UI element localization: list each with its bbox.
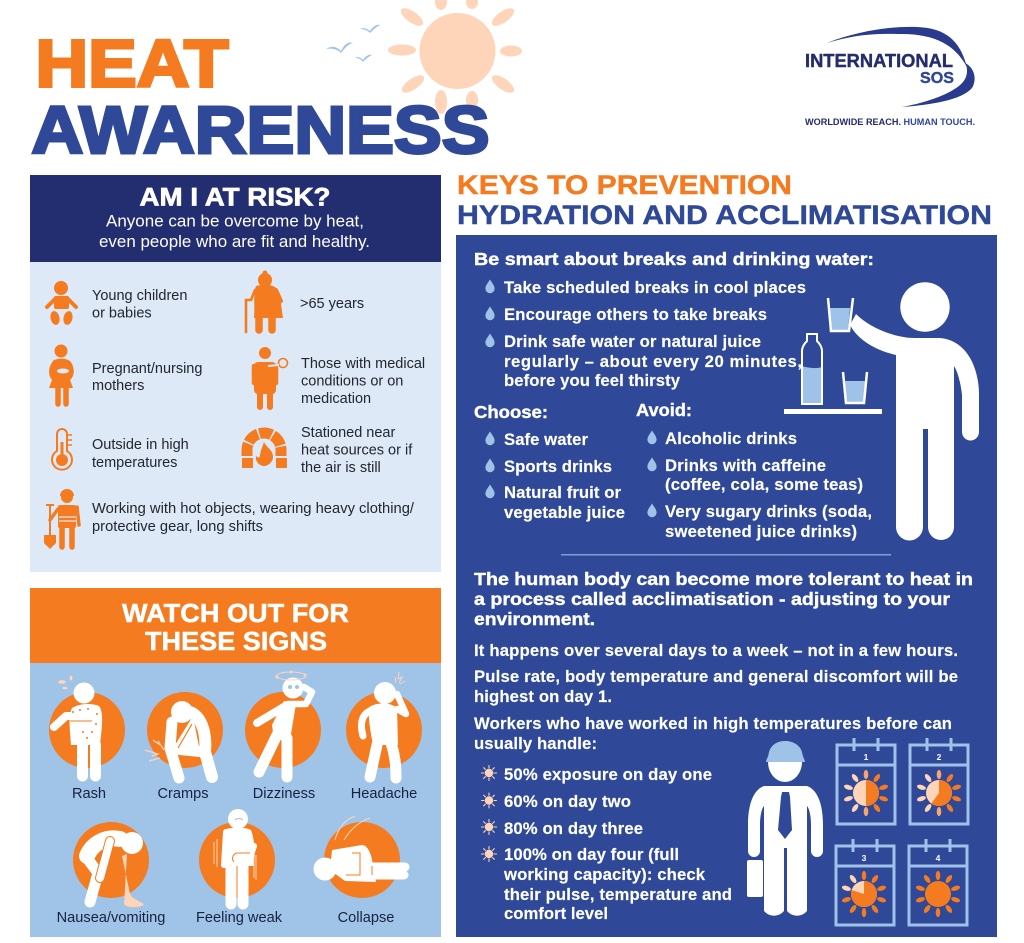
text: heat sources: the air is still [301,460,381,476]
text: acclimatisation details [474,641,958,753]
list: breaks: regularly – about every 20 minutes, [504,352,802,371]
birds [326,25,380,62]
label: cramps: Cramps [157,786,209,802]
list: choose [474,402,625,522]
list: avoid: Alcoholic drinks [665,429,797,448]
signs header: THESE SIGNS [145,628,327,656]
list: exposure schedule: comfort level [504,904,608,923]
illustration: worker with briefcase [747,741,823,916]
text: heat sources: heat sources or if [301,442,413,458]
text: heat sources: Stationed near [301,425,395,441]
title [32,26,490,168]
heading: keys to prevention: KEYS TO PREVENTION [457,170,792,200]
icon: medical person [254,347,288,407]
text: young children: or babies [92,306,152,322]
text: acclimatisation intro: environment. [474,609,595,629]
illustration: person drinking water [784,282,979,540]
calendar: day 4: 4 [936,853,941,863]
icon: construction worker [44,489,79,549]
text: outside: Outside in high [92,437,189,453]
list: choose: Choose: [474,402,548,422]
label: collapse: Collapse [338,910,394,926]
risk header: even people who are fit and healthy. [99,232,370,251]
sun illustration [388,0,522,114]
text: acclimatisation details: It happens over several days to a week – not in a few hours. [474,641,958,660]
list: avoid: Avoid: [636,400,692,420]
text: pregnant: Pregnant/nursing [92,361,202,377]
text: acclimatisation intro [474,569,973,629]
list: exposure schedule: 50% exposure on day one [504,765,712,784]
list: choose: Sports drinks [504,457,612,476]
calendar: day 3: 3 [862,853,867,863]
icon: elderly person [246,270,283,332]
list: exposure schedule: 100% on day four (full [504,845,679,864]
label: feeling weak: Feeling weak [196,910,283,926]
risk header [30,175,441,262]
list: avoid [636,400,872,541]
sign: nausea [73,822,149,907]
text: acclimatisation details: Pulse rate, body temperature and general discomfort will be [474,667,958,686]
icon: thermometer [52,429,72,470]
calendar: day 2 [910,738,968,824]
heading: keys to prevention [457,170,992,230]
text: acclimatisation details: usually handle: [474,734,597,753]
sign: dizziness [245,670,321,777]
label: nausea: Nausea/vomiting [57,910,165,926]
list: avoid: Drinks with caffeine [665,456,826,475]
list: exposure schedule: 60% on day two [504,792,631,811]
list: breaks: Take scheduled breaks in cool places [504,278,806,297]
sign: feeling weak [199,809,275,904]
label: rash: Rash [72,786,106,802]
text: protective gear: protective gear, long shifts [92,519,263,535]
list: avoid: (coffee, cola, some teas) [665,475,863,494]
list: breaks: Encourage others to take breaks [504,305,767,324]
panel: watch out for these signs [30,588,441,937]
text: medical: medication [301,391,371,407]
list: exposure schedule: their pulse, temperature and [504,885,732,904]
logo: International SOS: SOS [920,70,954,87]
list: breaks: Drink safe water or natural juice [504,332,761,351]
panel: hydration and acclimatisation [456,235,997,937]
text: medical: conditions or on [301,374,403,390]
risk header: Anyone can be overcome by heat, [106,212,364,230]
calendar: day 3 [836,839,894,925]
icon: oven heat source [242,433,287,468]
panel: am I at risk [30,175,441,572]
signs header [30,588,441,663]
logo: International SOS: WORLDWIDE REACH. HUMAN TOUCH. [805,117,975,128]
heading: keys to prevention: HYDRATION AND ACCLIMATISATION [457,200,992,230]
sign: collapse [314,816,405,898]
list: avoid: Very sugary drinks (soda, [665,502,872,521]
sign: cramps [145,692,223,778]
list: choose: Natural fruit or [504,483,622,502]
text: acclimatisation details: Workers who have worked in high temperatures before can [474,714,952,733]
list: exposure schedule: working capacity): check [503,865,706,884]
label: dizziness: Dizziness [253,786,315,802]
text: medical: Those with medical [301,356,425,372]
calendar: day 2: 2 [937,752,942,762]
text: working: Working with hot objects, wearing heavy clothing/ [92,501,415,517]
logo: International SOS [805,27,975,128]
calendar: day 4 [909,839,967,925]
list: exposure schedule [482,765,732,923]
risk header: AM I AT RISK? [140,184,330,212]
title: HEAT [36,26,229,102]
list: choose: vegetable juice [504,503,625,522]
sign: rash [49,676,125,776]
list: avoid: sweetened juice drinks) [665,522,857,541]
text: acclimatisation details: highest on day 1. [474,687,612,706]
list: exposure schedule: 80% on day three [504,819,643,838]
text: outside: temperatures [92,455,177,471]
calendar: day 1: 1 [864,752,869,762]
list: choose: Safe water [504,430,588,449]
calendar: day 1 [837,738,895,824]
list: breaks: before you feel thirsty [504,371,681,390]
heading: breaks and water: Be smart about breaks and drinking water: [474,249,874,269]
list: breaks [485,278,806,390]
sign: headache [346,672,422,778]
label: headache: Headache [351,786,417,802]
title: AWARENESS [32,93,490,168]
text: acclimatisation intro: a process called acclimatisation - adjusting to your [474,589,950,609]
icon: nursing mother [49,344,74,404]
logo: International SOS: INTERNATIONAL [805,51,953,71]
text: pregnant: mothers [92,378,144,394]
signs header: WATCH OUT FOR [122,600,349,628]
text: over 65: >65 years [300,296,364,312]
text: acclimatisation intro: The human body can become more tolerant to heat in [474,569,973,589]
text: young children: Young children [92,288,187,304]
icon: baby [47,281,76,326]
